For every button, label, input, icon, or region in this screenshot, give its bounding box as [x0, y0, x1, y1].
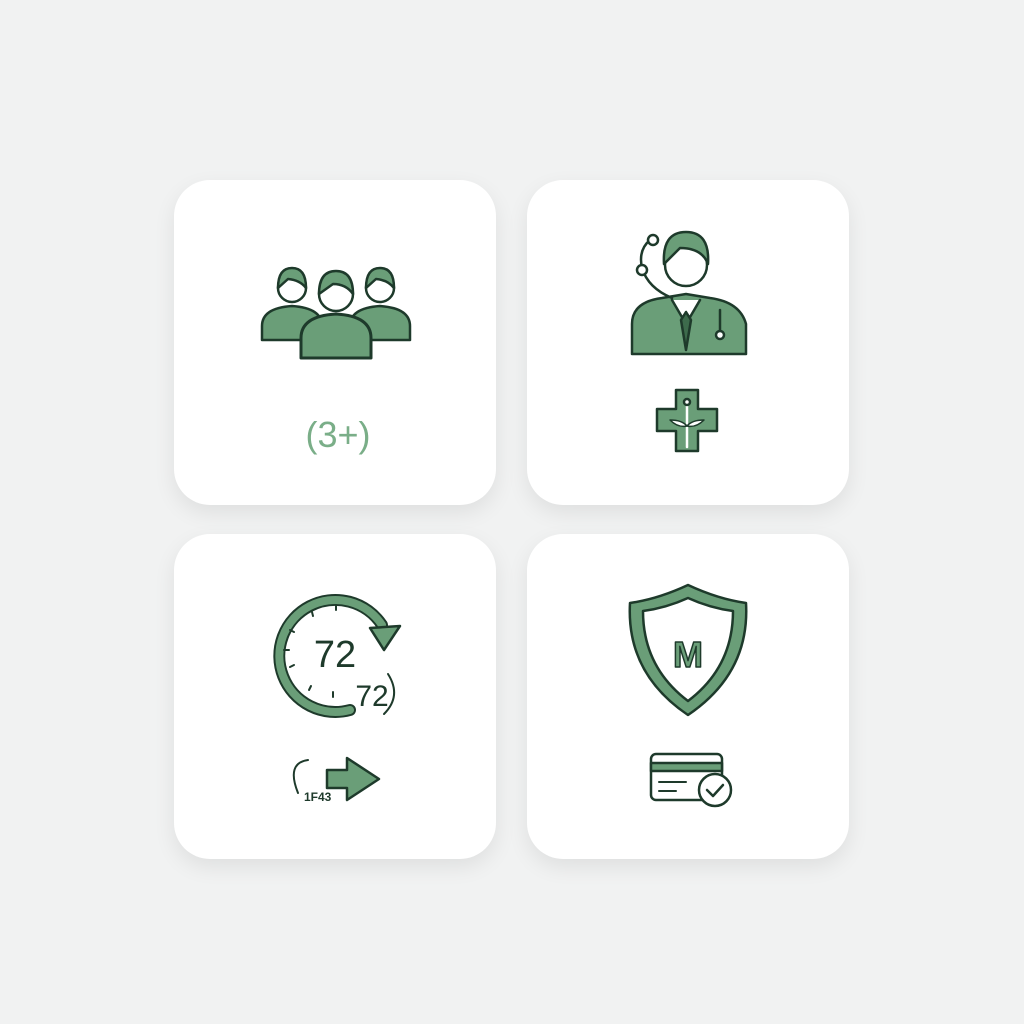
icon: medical cross	[657, 390, 717, 451]
icon: arrow 1F43	[294, 758, 379, 804]
panel: group	[174, 180, 496, 505]
icon: 72 clock arrow: 72	[314, 634, 356, 676]
icon: 72 clock arrow: 72	[355, 680, 389, 713]
panel: 72 hours	[174, 534, 496, 859]
icon: doctor	[632, 232, 746, 354]
icon: payment card check	[651, 754, 731, 806]
icon: shield M	[630, 585, 746, 715]
icon: shield M: M	[673, 634, 703, 675]
icon: 72 clock arrow	[279, 600, 400, 714]
icon: group of people	[262, 268, 410, 358]
icon: arrow 1F43: 1F43	[304, 790, 332, 804]
panel: shield	[527, 534, 849, 859]
text: 3+: (3+)	[305, 414, 371, 455]
panel: doctor	[527, 180, 849, 505]
